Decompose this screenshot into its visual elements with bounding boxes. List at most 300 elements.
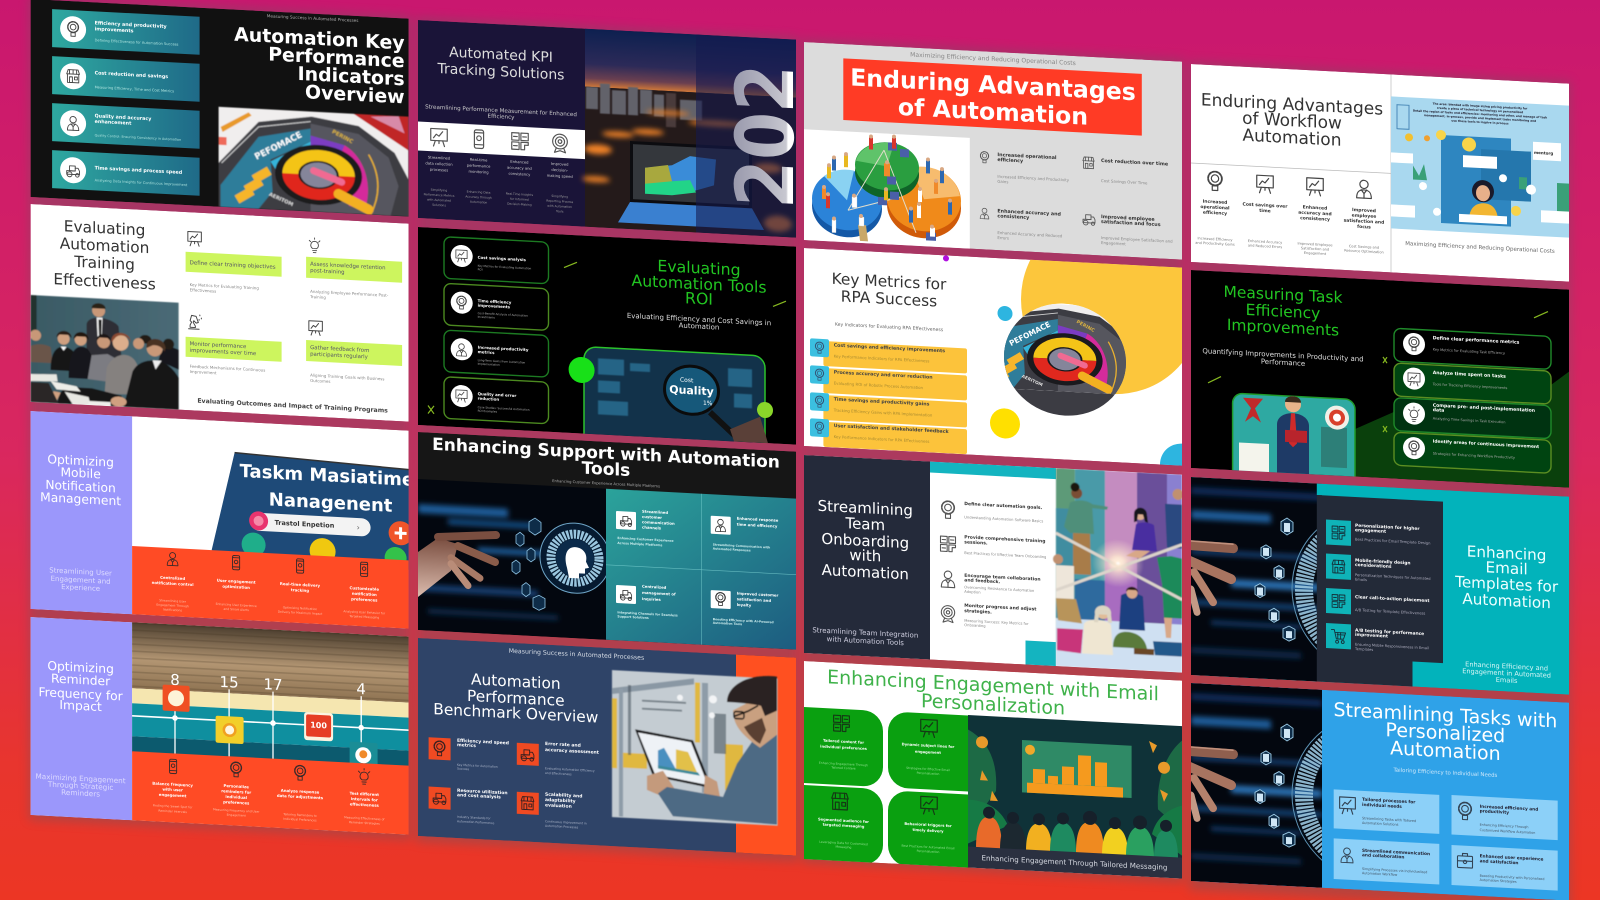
feature captions xyxy=(424,187,574,214)
benefit: accuracy: Improved Employee xyxy=(1297,242,1333,247)
title: Automation xyxy=(471,670,561,693)
feature labels: processes xyxy=(430,168,448,173)
feature: user engagement: optimization xyxy=(222,584,250,590)
metric: satisfaction: Key Performance Indicators for RPA Effectiveness xyxy=(834,434,929,444)
cell: inquiries xyxy=(616,582,678,622)
subtitle: Automation xyxy=(679,322,719,332)
kicker: Measuring Success in Automated Processes xyxy=(267,13,358,23)
dark green background shape xyxy=(1311,358,1569,488)
tile: tailored content: Enhancing Engagement Through xyxy=(819,761,868,767)
side panel: Reminders xyxy=(61,788,100,799)
box: efficiency: productivity xyxy=(1480,808,1509,816)
pill: time on tasks: Analyze time spent on tasks xyxy=(1433,370,1506,380)
cell: communication xyxy=(616,507,675,548)
feature: user engagement: User engagement xyxy=(217,578,256,585)
pill: compare data: Analyzing Time Savings in Task Execution xyxy=(1433,417,1505,424)
metric row: efficiency xyxy=(52,9,200,55)
city photo with laptop xyxy=(582,29,796,238)
benefit: cost savings: time xyxy=(1259,208,1271,214)
template tip: mobile: Mobile-friendly design xyxy=(1355,558,1411,566)
feature: accuracy: Enhanced Accuracy and Reduced xyxy=(997,230,1063,238)
feature: employee satisfaction: Improved Employee Satisfaction and xyxy=(1101,235,1173,244)
template tip: personalization: engagement xyxy=(1355,527,1386,535)
step: goals: Understanding Automation Software Basics xyxy=(964,515,1043,523)
metric: time savings xyxy=(810,392,967,427)
accent circles xyxy=(943,255,1204,489)
feature captions: Reporting Process xyxy=(546,199,574,204)
timeline image: 17 xyxy=(263,675,283,694)
step: monitor: Measuring Success: Key Metrics for xyxy=(964,619,1029,626)
metric row: cost: Measuring Efficiency, Time and Cost Metrics xyxy=(95,85,174,93)
feature captions: Enhancing Data xyxy=(467,190,491,195)
tile: tailored content: Tailored Content xyxy=(830,765,857,771)
title: Automation xyxy=(1462,590,1551,612)
hand and headset image xyxy=(418,479,610,640)
metric: time savings: Tracking Efficiency Gains with RPA Implementation xyxy=(833,407,933,418)
cell: response time: Automated Responses xyxy=(713,547,751,553)
feature captions: Decision-Making xyxy=(507,202,532,207)
side panel: Experience xyxy=(61,583,100,593)
teal accents xyxy=(930,462,1056,666)
yellow blob xyxy=(1021,209,1201,399)
feature: operational efficiency: Increased operational xyxy=(997,152,1057,161)
pill: quality xyxy=(444,377,548,424)
tip: personalize: Personalize xyxy=(224,783,249,789)
slide: Key Metrics for RPA Success xyxy=(804,198,1204,489)
feature: notification control xyxy=(152,551,194,613)
businessman image xyxy=(1233,393,1355,500)
metric row: efficiency: improvements xyxy=(95,26,134,34)
feature: preferences: Customizable xyxy=(350,585,379,592)
tile: subject lines: Personalization xyxy=(917,771,939,776)
metric row: time: Analyzing Data Insights for Continuous Improvement xyxy=(95,178,188,187)
tile: segmented audience: Messaging xyxy=(836,845,852,849)
step: collaboration: and feedback. xyxy=(964,577,1001,585)
side panel xyxy=(31,411,132,614)
feature: notification control: Engagement Through xyxy=(156,603,189,608)
laptop screen image: Nanagenent xyxy=(269,489,393,517)
metric: time savings: Time savings and productivity gains xyxy=(834,397,930,408)
side panel: Management xyxy=(40,490,121,508)
slide: Enhancing Engagement with Email Personalization xyxy=(804,661,1182,881)
illustration: use these tools to inspire in process xyxy=(1451,119,1509,126)
benefit: satisfaction: focus xyxy=(1357,224,1371,231)
pill: quality: ROI Examples xyxy=(478,409,498,414)
tip: analyze: Individual Preferences xyxy=(283,817,317,822)
metric: cost savings xyxy=(810,338,967,373)
slide: Evaluating Automation Training Effectiveness xyxy=(30,204,409,422)
tip: personalize xyxy=(213,761,260,818)
feature labels: Streamlined xyxy=(428,156,450,161)
feature: accuracy: consistency xyxy=(997,213,1030,221)
tip: balance frequency: Balance frequency xyxy=(152,781,193,788)
benefit: satisfaction: Resource Optimization xyxy=(1344,248,1384,255)
step: monitor: Monitor progress and adjust xyxy=(964,603,1037,613)
feature labels: Enhanced xyxy=(510,160,529,165)
metric: cost savings: Key Performance Indicators for RPA Effectiveness xyxy=(834,354,929,364)
illustration xyxy=(1391,96,1569,238)
title: Templates for xyxy=(1454,573,1559,596)
side panel: with xyxy=(849,546,881,566)
title: Performance xyxy=(467,687,565,710)
tile: behavioral triggers: Personalization xyxy=(917,849,939,854)
side panel: Optimizing xyxy=(47,659,114,676)
feature captions: Automation xyxy=(470,200,487,205)
pie chart illustration xyxy=(804,129,970,249)
feature: preferences: notification xyxy=(352,591,377,597)
feature labels xyxy=(425,155,573,179)
title: Training xyxy=(73,253,135,274)
illustration: create a piece of technical technology on personalized xyxy=(1437,106,1523,114)
cell: satisfaction: loyalty xyxy=(737,602,752,608)
step: goals xyxy=(942,500,1043,523)
pill: productivity: metrics xyxy=(478,349,495,355)
pill: time efficiency: Cost-Benefit Analysis of Automation xyxy=(478,311,528,318)
slide: Streamlining Team Onboarding with Automation xyxy=(804,455,1184,673)
step: collaboration: Adoption xyxy=(964,590,981,595)
title: Automation xyxy=(1390,737,1501,765)
benchmark: error rate: Error rate and xyxy=(545,741,581,749)
feature: operational efficiency xyxy=(980,151,1069,184)
slide: Enhancing Support with Automation Tools xyxy=(418,432,796,650)
box: efficiency: Customized Workflow Automation xyxy=(1480,828,1535,835)
cell: response time xyxy=(711,514,779,554)
laptop screen image xyxy=(212,451,431,572)
benchmark: error rate: Evaluating Automation Efficiency xyxy=(545,766,595,773)
feature labels: Improved xyxy=(551,162,568,167)
cell: satisfaction: satisfaction and xyxy=(737,596,771,603)
feature: cost reduction: Cost Savings Over Time xyxy=(1101,178,1148,185)
benefit: satisfaction xyxy=(1344,179,1384,255)
tile: segmented audience: Segmented audience for xyxy=(818,817,869,824)
benefit: satisfaction: Improved xyxy=(1352,207,1376,214)
side panel: with Automation Tools xyxy=(827,635,904,647)
feature: preferences: preferences xyxy=(351,596,378,603)
box: efficiency: Enhancing Efficiency Through xyxy=(1480,823,1529,829)
pill: productivity: Long-Term Gains from Automation xyxy=(478,358,525,365)
tip: test intervals xyxy=(344,768,385,826)
template tip: personalization: Best Practices for Email Template Design xyxy=(1355,538,1431,545)
timeline image: 4 xyxy=(356,680,366,698)
benefit: operational efficiency: Increased Efficiency xyxy=(1198,236,1232,242)
subtitle: Tailoring Efficiency to Individual Needs xyxy=(1392,767,1498,779)
tile: segmented audience: Leveraging Data for Customized xyxy=(819,840,868,846)
pill: performance metrics: Define clear performance metrics xyxy=(1433,335,1520,346)
slide: Measuring Task Efficiency Improvements xyxy=(1191,270,1569,511)
benefit: cost savings: Enhanced Accuracy xyxy=(1248,239,1282,245)
template tip: a/b testing: improvement xyxy=(1355,632,1388,640)
box: user experience: Boosting Productivity with Personalized xyxy=(1480,874,1544,881)
orange lower band xyxy=(132,751,409,835)
title banner xyxy=(843,58,1142,136)
pill: productivity: Implementation xyxy=(478,362,500,367)
feature labels: performance xyxy=(467,164,491,169)
feature captions: Simplifying xyxy=(551,194,568,199)
pill: cost savings xyxy=(444,237,548,284)
benefit: operational efficiency: Increased xyxy=(1203,199,1227,206)
side panel: Mobile xyxy=(60,465,101,481)
feature: operational efficiency: efficiency xyxy=(997,157,1024,164)
tile: segmented audience xyxy=(804,785,883,865)
tile: behavioral triggers xyxy=(888,790,968,870)
tip: analyze xyxy=(277,764,324,823)
feature captions: with Automation xyxy=(547,204,572,209)
template tip: mobile: Personalization Techniques for Automated xyxy=(1355,573,1430,581)
tile: behavioral triggers: Behavioral triggers for xyxy=(904,822,952,828)
side panel: Through Strategic xyxy=(47,780,113,792)
tip: personalize: individual xyxy=(225,794,247,800)
metric row: quality: Quality Control: Ensuring Consistency in Automation xyxy=(95,133,181,142)
subtitle: Key Indicators for Evaluating RPA Effectiveness xyxy=(835,322,944,333)
title: Tools xyxy=(582,459,630,481)
feature: real-time delivery xyxy=(278,558,323,616)
laptop screen image: › xyxy=(357,523,360,532)
template tip: a/b testing xyxy=(1326,623,1429,655)
feature labels: decision- xyxy=(551,168,569,173)
box: tailored processes: Tailored processes for xyxy=(1362,797,1416,806)
template tip: call to action: Clear call-to-action placement xyxy=(1355,594,1429,604)
objective: monitor: Monitor performance xyxy=(190,341,247,350)
tip: personalize: preferences xyxy=(223,799,250,806)
title: Email xyxy=(1486,558,1528,579)
pill: quality: Quality and error xyxy=(478,391,516,398)
timeline image: 100 xyxy=(310,721,327,730)
feature: operational efficiency: Gains xyxy=(997,179,1008,184)
objective: gather: Aligning Training Goals with Business xyxy=(310,373,384,381)
slide: Streamlining Tasks with Personalized Automation xyxy=(1187,683,1569,900)
objective: monitor: Feedback Mechanisms for Continuous xyxy=(190,364,265,373)
objective: gather: Gather feedback from xyxy=(310,345,369,354)
cell: communication: Enhancing Customer Experience xyxy=(617,536,674,543)
objective: assess: Assess knowledge retention xyxy=(310,262,386,271)
tip: analyze: Tailoring Reminders to xyxy=(282,812,317,818)
subtitle: Engagement in Automated xyxy=(1462,667,1551,680)
feature: preferences: Analyzing User Behavior for xyxy=(343,609,386,615)
feature: notification control: Notifications xyxy=(163,607,182,612)
laptop screen image: Trastol Enpetion xyxy=(275,519,335,530)
cell: satisfaction: Boosting Efficiency with AI-Powered xyxy=(713,617,774,624)
step: goals: Define clear automation goals. xyxy=(964,501,1043,511)
cell: communication: customer xyxy=(642,514,662,520)
box: efficiency xyxy=(1452,795,1558,840)
side panel: Automation xyxy=(822,561,909,583)
title: Enhancing Engagement with Email xyxy=(827,666,1159,705)
title: RPA Success xyxy=(841,288,937,311)
footer line: Evaluating Outcomes and Impact of Training Programs xyxy=(197,398,388,415)
objective: gather: Outcomes xyxy=(310,378,330,384)
pill: time on tasks xyxy=(1394,363,1551,404)
feature: accuracy: Enhanced accuracy and xyxy=(997,208,1062,218)
panel rules xyxy=(1191,64,1391,272)
box: tailored processes: Streamlining Tasks with Tailored xyxy=(1362,816,1416,823)
accent marks xyxy=(1208,294,1548,441)
pill: time efficiency: improvements xyxy=(478,303,511,309)
benchmark: efficiency: Efficiency and speed xyxy=(457,738,509,746)
decorative circles xyxy=(569,356,773,418)
subtitle: Evaluating Efficiency and Cost Savings in xyxy=(627,312,771,327)
benefit: accuracy: Engagement xyxy=(1304,251,1327,256)
benchmark: resources: and cost analysis xyxy=(457,792,501,801)
orange lower band xyxy=(132,546,409,629)
teal grid xyxy=(606,489,796,650)
feature: notification control: Centralized xyxy=(160,575,185,581)
benefit: accuracy: Enhanced xyxy=(1303,204,1327,212)
tip: balance frequency: Finding the Sweet Spot for xyxy=(153,803,193,809)
pill: improvement areas xyxy=(1394,432,1551,473)
cost quality magnifier image: Quality xyxy=(669,383,714,398)
box: user experience: and satisfaction xyxy=(1480,858,1519,866)
feature: user engagement: Enhancing User Experience xyxy=(216,602,257,608)
timeline image: 15 xyxy=(220,673,239,692)
pill: time efficiency: Time efficiency xyxy=(478,298,512,305)
box: user experience: Automation Strategies xyxy=(1480,878,1517,884)
metric: satisfaction xyxy=(810,418,967,454)
feature labels: monitoring xyxy=(469,170,489,175)
feature labels: accuracy and xyxy=(507,166,532,171)
audience and bar chart illustration xyxy=(968,715,1182,859)
kicker: Maximizing Efficiency and Reducing Operational Costs xyxy=(910,52,1076,67)
side panel: Streamlining xyxy=(818,497,913,520)
cell: response time: Streamlining Communication with xyxy=(713,543,770,550)
title banner: Enduring Advantages xyxy=(850,63,1136,106)
objective: monitor: improvements over time xyxy=(190,348,257,357)
box: tailored processes xyxy=(1334,789,1439,834)
benchmark: efficiency: Success xyxy=(457,767,470,771)
title: ROI xyxy=(685,288,713,309)
feature: employee satisfaction: Engagement xyxy=(1101,240,1126,246)
box: user experience xyxy=(1452,845,1558,891)
feature: real-time delivery: Delivery for Maximum Impact xyxy=(278,610,323,616)
subtitle: Emails xyxy=(1496,676,1518,685)
cell: inquiries: Support Solutions xyxy=(617,614,649,620)
tip: personalize: reminders for xyxy=(221,788,251,795)
title: Effectiveness xyxy=(53,270,156,294)
pill: cost savings: Cost savings analysis xyxy=(478,255,526,262)
pill: time efficiency: Investments xyxy=(478,315,495,320)
tip: balance frequency: Reminder Intervals xyxy=(158,809,187,814)
benefit: cost savings xyxy=(1243,174,1288,250)
title: Enduring Advantages xyxy=(1201,90,1383,120)
metric row: cost: Cost reduction and savings xyxy=(95,70,168,80)
feature labels: making speed xyxy=(547,174,573,179)
objective: gather: participants regularly xyxy=(310,352,369,361)
cell: satisfaction xyxy=(711,589,778,628)
tile: tailored content xyxy=(804,707,883,787)
tile: subject lines: Dynamic subject lines for xyxy=(902,742,955,749)
benchmark: resources: Automation Performance xyxy=(457,819,495,825)
title: Streamlining Tasks with xyxy=(1333,699,1557,733)
subtitle: Efficiency xyxy=(488,114,515,121)
metric: accuracy: Process accuracy and error reduction xyxy=(834,370,933,381)
tile: tailored content: Tailored content for xyxy=(823,739,864,745)
box: communication: Streamlined communication xyxy=(1362,848,1430,857)
step: collaboration: Overcoming Resistance to Automation xyxy=(964,585,1034,593)
benchmark: error rate xyxy=(517,740,600,778)
subtitle: Quantifying Improvements in Productivity and xyxy=(1202,347,1364,363)
side panel: Impact xyxy=(59,698,102,714)
side panel: Notification xyxy=(45,478,116,495)
benefit: operational efficiency: and Productivity Gains xyxy=(1195,241,1235,247)
step: training: Best Practices for Effective Team Onboarding xyxy=(964,551,1046,559)
dark content panel xyxy=(1317,484,1443,688)
feature: user engagement: and Smart Alerts xyxy=(224,607,249,612)
benchmark: scalability: adaptability xyxy=(545,797,576,805)
template tip: personalization xyxy=(1326,520,1431,550)
caption bar: Enhancing Engagement Through Tailored Messaging xyxy=(982,853,1167,872)
template tip: mobile: considerations xyxy=(1355,562,1392,570)
pill: cost savings: Key Metrics for Evaluating Automation xyxy=(478,264,532,271)
pill: improvement areas: Strategies for Enhancing Workflow Productivity xyxy=(1433,452,1515,460)
box: tailored processes: Automation Solutions xyxy=(1362,821,1399,827)
title: Performance xyxy=(268,43,405,72)
benchmark: error rate: accuracy assessment xyxy=(545,747,600,756)
benchmark: error rate: and Effectiveness xyxy=(545,771,572,776)
step: training: Provide comprehensive training xyxy=(964,534,1045,545)
pill: productivity xyxy=(444,330,548,377)
feature captions: Real-Time Insights xyxy=(506,192,533,197)
benefit: satisfaction: satisfaction and xyxy=(1344,218,1384,226)
template tip: mobile: Emails xyxy=(1355,578,1367,582)
tile: behavioral triggers: Best Practices for Automated Email xyxy=(901,844,955,850)
pill: compare data: Compare pre- and post-implementation xyxy=(1433,403,1535,414)
feature: preferences: Targeted Messaging xyxy=(348,614,379,620)
metric row: time xyxy=(52,150,200,196)
template tip: a/b testing: Templates xyxy=(1354,647,1373,652)
objective: assess: Training xyxy=(309,294,326,300)
title: Benchmark Overview xyxy=(433,700,598,727)
big year text: 202 xyxy=(719,62,812,210)
pill: cost savings: ROI xyxy=(478,267,483,272)
metric: accuracy xyxy=(810,365,967,400)
tip: personalize: Measuring Frequency and User xyxy=(213,807,260,814)
feature: accuracy: Errors xyxy=(997,235,1009,241)
feature captions: Accuracy through xyxy=(465,194,492,200)
step: monitor: strategies. xyxy=(964,608,992,616)
cost quality magnifier image: 1% xyxy=(703,400,713,407)
title: Improvements xyxy=(1227,316,1339,340)
illustration: mentorg xyxy=(1534,150,1553,156)
benchmark: scalability: Automation Processes xyxy=(545,824,579,829)
objective: assess: post-training xyxy=(310,268,345,276)
benefit: cost savings: Cost savings over xyxy=(1243,201,1288,210)
benefit: accuracy: consistency xyxy=(1300,215,1330,223)
feature: accuracy xyxy=(980,207,1063,243)
feature captions: Simplifying xyxy=(431,188,447,193)
side panel: Optimizing xyxy=(47,452,114,470)
benchmark: resources: Resource utilization xyxy=(457,788,508,796)
box: communication: and collaboration xyxy=(1362,852,1404,860)
side panel xyxy=(804,455,930,660)
objective: define xyxy=(186,231,282,297)
title: Automated KPI xyxy=(449,45,553,66)
tip: test intervals: Test different xyxy=(350,791,379,797)
orange strip xyxy=(736,655,796,856)
benchmark: scalability: evaluation xyxy=(545,802,572,810)
tip: balance frequency: with user xyxy=(162,786,183,793)
title: Automation Tools xyxy=(631,271,767,297)
cell: communication: communication xyxy=(642,519,675,526)
feature: preferences xyxy=(343,561,386,620)
cell: satisfaction: Automation Tools xyxy=(713,621,742,626)
subtitle: Streamlining Performance Measurement for Enhanced xyxy=(425,104,577,118)
cell: communication: Streamlined xyxy=(642,509,668,515)
side panel: Frequency for xyxy=(38,685,124,704)
benchmark: resources xyxy=(429,786,508,826)
title: Efficiency xyxy=(1246,301,1320,323)
tile: segmented audience: targeted messaging xyxy=(823,823,865,829)
slide: Evaluating Automation Tools ROI xyxy=(418,227,796,468)
gauge image xyxy=(219,107,409,217)
